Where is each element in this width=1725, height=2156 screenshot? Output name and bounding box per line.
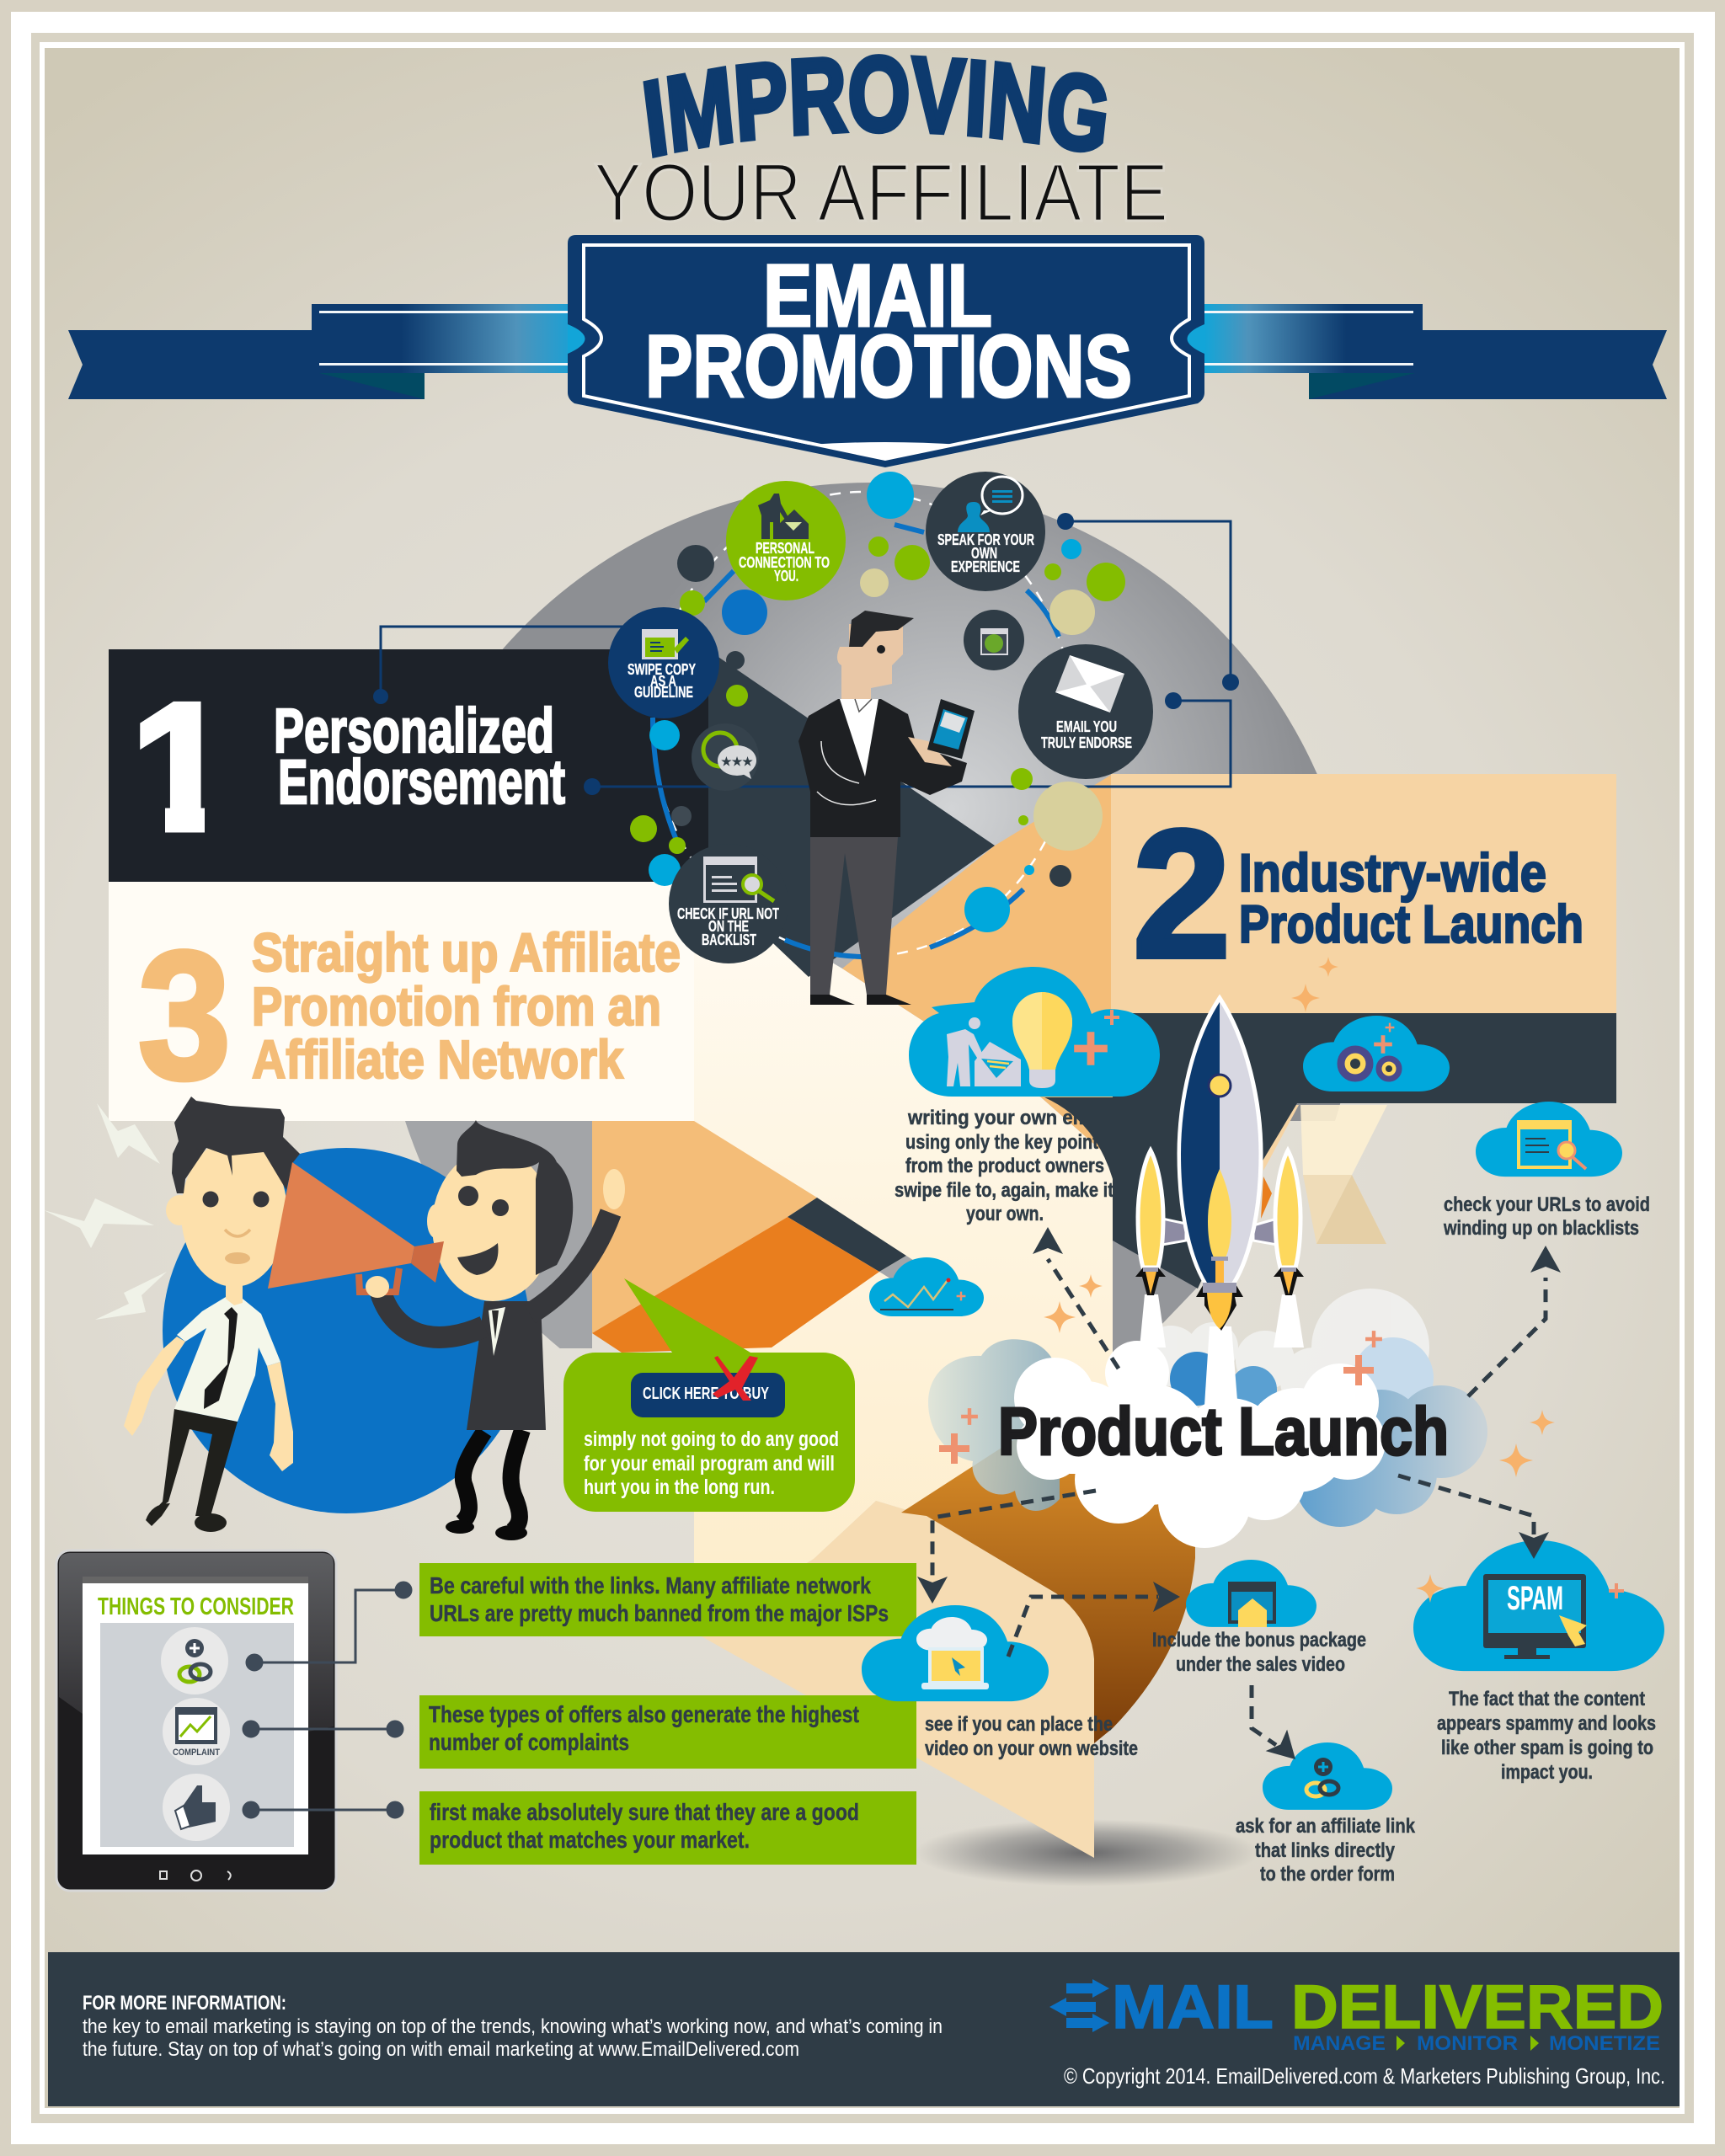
panel 3: straight up affiliate promotion: Affiliate Network	[252, 1029, 623, 1090]
bubble: chat icon	[692, 723, 759, 791]
lightning bolts	[44, 1103, 167, 1320]
red x mark	[713, 1356, 758, 1401]
icon: thumbs up	[163, 1774, 230, 1841]
cloud: video laptop	[862, 1605, 1049, 1701]
cast shadow	[914, 1819, 1259, 1886]
bubble: personal connection: YOU.	[774, 568, 798, 584]
logo: email delivered: DELIVERED	[1291, 1973, 1664, 2041]
heading 1: Personalized	[274, 696, 554, 766]
bubble: check url backlist: BACKLIST	[702, 931, 756, 948]
arrow heads	[917, 1227, 1561, 1770]
logo: email delivered: MAIL	[1112, 1973, 1274, 2041]
bubble: personal connection: PERSONAL	[756, 540, 814, 557]
title: improving: IMPROVING	[643, 54, 1107, 158]
plus signs	[939, 1331, 1382, 1464]
bubble: check url backlist	[669, 844, 788, 963]
orange upper wedge	[842, 774, 1113, 1161]
text: check your urls: check your URLs to avoid	[1444, 1193, 1650, 1216]
icon: link	[161, 1627, 228, 1694]
left man listening	[124, 1097, 300, 1532]
tablet heading: THINGS TO CONSIDER	[98, 1593, 294, 1620]
text: bonus package: Include the bonus package	[1152, 1629, 1366, 1652]
text: affiliate link: ask for an affiliate link	[1236, 1815, 1416, 1838]
callout: click here to buy: hurt you in the long run.	[584, 1476, 775, 1499]
text: affiliate link: to the order form	[1260, 1863, 1395, 1886]
panel 3: straight up affiliate promotion	[109, 882, 694, 1121]
callout: click here to buy: CLICK HERE TO BUY	[643, 1385, 769, 1403]
heading 2: Industry-wide	[1239, 844, 1546, 903]
cloud: spam monitor	[1413, 1540, 1664, 1671]
green bar: good product	[419, 1791, 916, 1865]
footer bar	[48, 1952, 1680, 2106]
back clouds	[928, 1289, 1487, 1527]
logo: email delivered: MANAGE	[1293, 2032, 1386, 2055]
text: writing your own email	[895, 1107, 1114, 1225]
text: spammy content: impact you.	[1501, 1761, 1593, 1784]
connector lines and orbit	[373, 492, 1239, 957]
logo: email delivered: MONITOR	[1417, 2032, 1518, 2055]
sparkles	[1044, 957, 1555, 1477]
central arrow shapes	[592, 882, 1387, 1858]
text: spammy content: like other spam is going to	[1441, 1737, 1653, 1759]
blue circle behind characters	[163, 1148, 530, 1513]
badge: email promotions: PROMOTIONS	[645, 318, 1132, 416]
green bar: complaints: number of complaints	[429, 1729, 629, 1755]
bubble: personal connection: CONNECTION TO	[739, 554, 830, 571]
bubble: check url backlist: ON THE	[708, 918, 749, 935]
heading: product launch: Product Launch	[998, 1394, 1449, 1469]
text: check your urls	[1443, 1193, 1650, 1240]
icon: complaint: COMPLAINT	[173, 1748, 220, 1758]
bubble: personal connection	[726, 481, 846, 600]
text: affiliate link: that links directly	[1255, 1839, 1396, 1862]
bubble: speak for your own experience	[926, 472, 1045, 591]
right man with megaphone	[268, 1120, 625, 1540]
tablet: things to consider	[56, 1550, 336, 1891]
number 2: 2	[1133, 792, 1231, 995]
footer information text: FOR MORE INFORMATION:	[83, 1992, 286, 2015]
text: spammy content: appears spammy and looks	[1437, 1712, 1656, 1735]
callout: click here to buy: simply not going to do any good	[584, 1428, 839, 1451]
cloud: gears	[1303, 1016, 1450, 1091]
panel 3: straight up affiliate promotion: Promotion from an	[252, 976, 661, 1037]
panel 2: industry-wide product launch	[1111, 774, 1616, 1013]
icon: complaint	[163, 1698, 230, 1765]
panel 1: personalized endorsement: Endorsement	[278, 747, 565, 817]
man with phone	[798, 611, 975, 1005]
bubble: swipe copy: AS A	[650, 673, 676, 690]
bubble: speak for your own experience: SPEAK FOR YOUR	[937, 531, 1034, 548]
badge: email promotions	[568, 235, 1204, 467]
cloud: chart	[869, 1257, 984, 1316]
main white cloud	[1014, 1341, 1386, 1548]
text: bonus package: under the sales video	[1176, 1653, 1345, 1676]
title: your affiliate: YOUR AFFILIATE	[594, 147, 1168, 238]
panel 1: personalized endorsement	[109, 649, 708, 882]
cloud: lightbulb	[909, 967, 1160, 1097]
bubble: speak for your own experience: EXPERIENCE	[951, 558, 1020, 575]
heading 3: Straight up Affiliate	[252, 922, 681, 983]
ribbon banner	[68, 304, 1667, 399]
panel 2: industry-wide product launch: Product Launch	[1239, 895, 1583, 954]
text: writing your own email: writing your own email	[907, 1107, 1110, 1129]
logo: email delivered	[1049, 1973, 1664, 2055]
dashed arrows	[932, 1259, 1546, 1745]
connector lines from tablet	[243, 1582, 412, 1818]
bubble: swipe copy: GUIDELINE	[634, 684, 693, 701]
footer information text	[83, 1992, 943, 2061]
badge heading: email: EMAIL	[763, 247, 992, 345]
number 3: 3	[138, 913, 231, 1117]
green bar: good product: product that matches your market.	[430, 1827, 750, 1853]
text: writing your own email: from the product owners	[905, 1155, 1104, 1177]
bubble: globe window icon	[964, 610, 1024, 670]
small decorative circles	[630, 472, 1125, 932]
cloud: check url	[1476, 1102, 1622, 1177]
text: writing your own email: swipe file to, again, make it	[895, 1179, 1114, 1202]
text: place the video	[925, 1713, 1138, 1760]
callout: click here to buy	[563, 1278, 855, 1512]
text: place the video: video on your own website	[925, 1737, 1138, 1760]
text: spammy content: The fact that the content	[1449, 1688, 1645, 1710]
footer information text: the future. Stay on top of what’s going on with email marketing at www.EmailDelivered.com	[83, 2038, 799, 2061]
text: writing your own email: using only the key points	[905, 1131, 1108, 1154]
tablet buttons	[160, 1870, 231, 1881]
dark chevron band	[1044, 1013, 1616, 1289]
bubble: email you truly endorse	[1018, 644, 1153, 779]
dark triangle behind man	[708, 650, 995, 977]
text: bonus package	[1152, 1629, 1366, 1676]
cloud: spam monitor: SPAM	[1507, 1580, 1563, 1617]
bubble: check url backlist: CHECK IF URL NOT	[677, 905, 779, 922]
green bar: complaints	[419, 1695, 916, 1769]
number 1: 1	[131, 664, 232, 868]
green bar: complaints: These types of offers also generate the highest	[429, 1701, 859, 1727]
logo: email delivered: MONETIZE	[1549, 2032, 1660, 2055]
bubble: email you truly endorse: EMAIL YOU	[1056, 718, 1117, 735]
bubble: chat icon: ★★★	[721, 755, 753, 768]
grey dome background	[382, 483, 1359, 1460]
cloud: affiliate link	[1263, 1742, 1392, 1810]
green bar: careful with links: URLs are pretty much banned from the major ISPs	[430, 1600, 889, 1626]
green bar: good product: first make absolutely sure that they are a good	[430, 1799, 859, 1825]
bubble: email you truly endorse: TRULY ENDORSE	[1041, 734, 1132, 751]
green bar: careful with links: Be careful with the links. Many affiliate network	[430, 1572, 871, 1598]
text: writing your own email: your own.	[966, 1203, 1044, 1225]
bubble: swipe copy: SWIPE COPY	[628, 661, 696, 678]
text: affiliate link	[1236, 1815, 1416, 1886]
rocket	[1135, 998, 1304, 1432]
footer information text: the key to email marketing is staying on top of the trends, knowing what’s working now, and what’s coming in	[83, 2015, 943, 2038]
callout: click here to buy: for your email program and will	[584, 1452, 835, 1476]
bubble: speak for your own experience: OWN	[971, 545, 997, 562]
text: place the video: see if you can place the	[925, 1713, 1113, 1736]
green bar: careful with links	[419, 1563, 916, 1636]
text: spammy content	[1437, 1688, 1656, 1784]
cloud: bonus box	[1186, 1560, 1316, 1627]
bubble: swipe copy	[608, 607, 719, 718]
text: check your urls: winding up on blacklists	[1443, 1217, 1639, 1240]
